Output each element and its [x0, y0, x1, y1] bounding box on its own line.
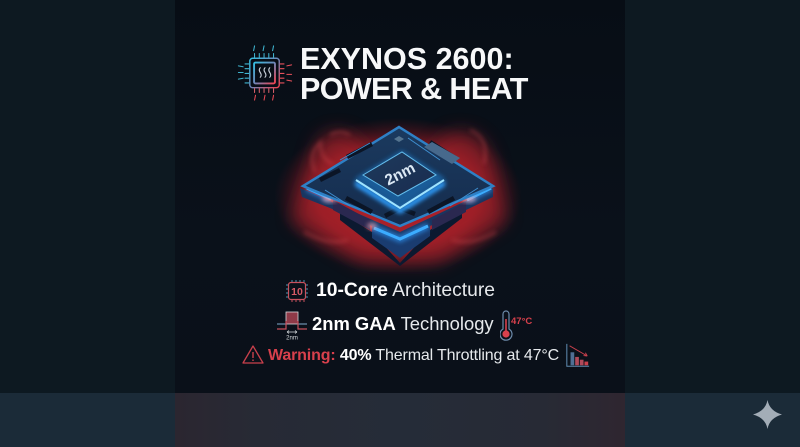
circuit board top [303, 127, 493, 226]
icon: GAA transistor: 2nm [286, 336, 298, 342]
icon: chip with heat waves [238, 45, 292, 101]
title block with chip icon [238, 42, 528, 106]
feature: 10-Core Architecture [286, 280, 495, 302]
icon: declining bar chart [566, 344, 590, 367]
icon: GAA transistor [277, 312, 307, 342]
title text: POWER & HEAT [300, 72, 528, 106]
label: 10-Core Architecture [316, 280, 495, 301]
feature: 2nm GAA Technology [277, 310, 532, 342]
chip lower base [300, 188, 493, 266]
central die with 2nm label [355, 150, 445, 214]
icon: 10 core chip: 10 [291, 286, 303, 298]
background panel: dark centre column [175, 0, 625, 393]
heat glow [274, 118, 522, 274]
label: 2nm GAA Technology [312, 313, 494, 334]
icon: four-point sparkle [753, 400, 782, 429]
background panel: bottom band centre tint [175, 393, 625, 447]
illustration: glowing 2nm chip with red heat [278, 121, 518, 274]
title text [300, 42, 528, 106]
icon: 10 core chip [286, 280, 308, 302]
feature: thermal throttling warning [242, 344, 590, 367]
background panel: bottom band [0, 393, 800, 447]
icon: thermometer 47°C: 47°C [511, 316, 532, 327]
label: Warning: 40% Thermal Throttling at 47°C [268, 347, 559, 364]
icon: warning triangle [242, 345, 264, 364]
title text: EXYNOS 2600: [300, 42, 514, 76]
icon: thermometer 47°C [500, 310, 532, 341]
central die with 2nm label: 2nm [382, 160, 418, 189]
